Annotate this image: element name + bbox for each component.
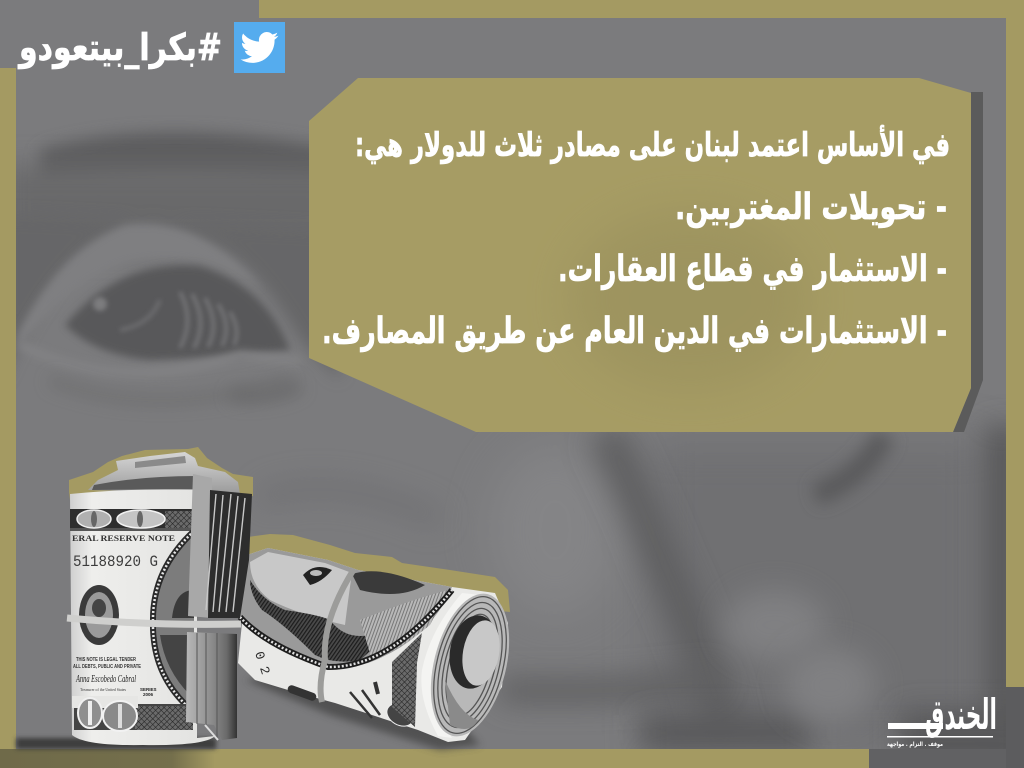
face [250, 552, 352, 625]
coat lines [360, 590, 448, 660]
cheek and wrinkles, lower right [230, 385, 1024, 768]
panel text lines [322, 124, 950, 352]
shadow under money rolls [0, 670, 480, 768]
legal text and signature [73, 657, 157, 697]
roll body [238, 548, 508, 742]
money roll, standing [67, 447, 253, 745]
legal text and signature: Treasurer of the United States [80, 687, 126, 692]
large 100 ovals and bottom band [72, 696, 193, 731]
hashtag heading: #بكرا_بيتعودو [17, 26, 222, 69]
gold cut-out backing [248, 534, 510, 612]
gold cut-out backing [69, 447, 253, 500]
legal text and signature: Anna Escobedo Cabral [75, 674, 136, 685]
rubber band [67, 618, 241, 624]
serial number: 51188920 G [73, 553, 158, 571]
seal [79, 585, 119, 645]
note details [251, 650, 417, 731]
top dome [88, 452, 240, 494]
portrait area [240, 548, 452, 666]
logo tagline: موقف . التزام . مواجهة [887, 741, 943, 748]
rubber band [321, 569, 354, 702]
note details: 0 2 [251, 650, 273, 676]
beaded oval border [240, 590, 452, 667]
logo: Al Khandaq [887, 690, 997, 748]
top ornament band [70, 509, 194, 531]
engraved panel [392, 633, 422, 727]
legal text and signature: THIS NOTE IS LEGAL TENDER [76, 657, 136, 663]
legal text and signature: SERIES [140, 687, 157, 692]
nose shadow [352, 571, 425, 594]
roll body [70, 490, 215, 745]
spiral end [417, 585, 523, 745]
white edge strip [421, 593, 490, 738]
note label: ERAL RESERVE NOTE [72, 533, 175, 543]
money roll, lying [238, 534, 523, 745]
hair [250, 580, 376, 662]
panel: text callout [309, 78, 983, 432]
portrait oval [153, 531, 194, 705]
eye and brow, left side [0, 132, 340, 400]
legal text and signature: ALL DEBTS, PUBLIC AND PRIVATE [73, 664, 142, 670]
icon: twitter bird [234, 22, 285, 73]
folded bills stack [186, 474, 252, 740]
legal text and signature: 2006 [143, 692, 154, 697]
eye [303, 567, 332, 585]
